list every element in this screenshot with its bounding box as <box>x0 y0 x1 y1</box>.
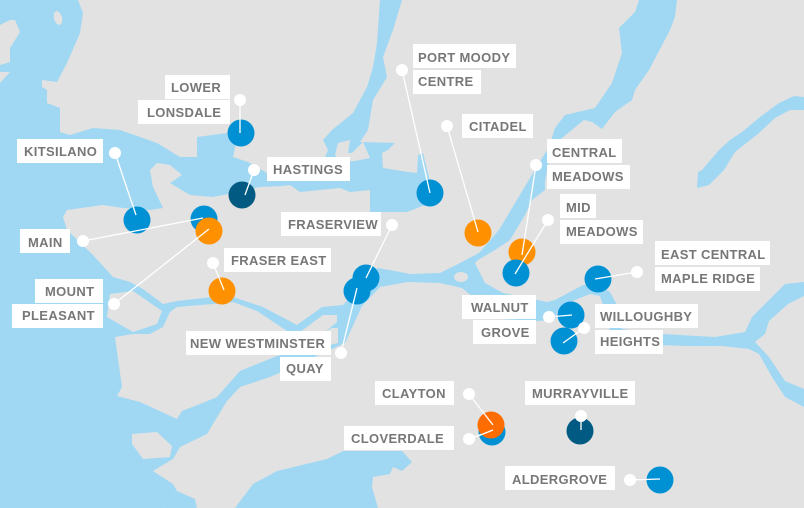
town centre: Murrayville: MURRAYVILLE <box>532 386 629 401</box>
town centre: Lower Lonsdale <box>138 75 254 146</box>
town centre: Main: MAIN <box>28 235 63 250</box>
land: river island <box>454 272 468 282</box>
water: Boundary Bay <box>163 451 412 508</box>
town centre: Central Meadows: CENTRAL <box>552 145 617 160</box>
town centre: Port Moody Centre <box>396 44 516 206</box>
land: Sea Island <box>107 291 162 332</box>
town centre: Lower Lonsdale: LONSDALE <box>147 105 221 120</box>
town centre: Kitsilano: KITSILANO <box>24 144 97 159</box>
water: strait, Burrard Inlet and Fraser north arm <box>0 0 432 508</box>
town centre: Mount Pleasant: MOUNT <box>45 284 94 299</box>
town centre: Citadel <box>441 114 533 246</box>
town centre: Walnut Grove <box>462 295 584 344</box>
town centre: Port Moody Centre: PORT MOODY <box>418 50 510 65</box>
town centre: Aldergrove <box>505 466 674 494</box>
town centre: Hastings: HASTINGS <box>273 162 343 177</box>
land: Richmond <box>115 302 338 419</box>
town centre: Cloverdale <box>344 418 506 450</box>
town centre: Fraserview: FRASERVIEW <box>288 217 378 232</box>
town centre: Mid Meadows: MID <box>566 200 591 215</box>
town centre: Main <box>20 206 218 253</box>
land: top-left islands <box>0 20 20 83</box>
town centre: New Westminster Quay <box>186 278 370 381</box>
town centre: Willoughby Heights: WILLOUGHBY <box>600 309 692 324</box>
town centre: Clayton <box>375 381 504 438</box>
town centre: Lower Lonsdale: LOWER <box>171 80 221 95</box>
town centre: Walnut Grove: WALNUT <box>471 300 529 315</box>
town centre: Kitsilano <box>17 139 150 234</box>
town centre: East Central Maple Ridge <box>584 241 770 292</box>
town centre: Mount Pleasant <box>12 218 222 328</box>
town centre: Aldergrove: ALDERGROVE <box>512 472 607 487</box>
town centre: Central Meadows <box>508 139 630 266</box>
town centre: East Central Maple Ridge: MAPLE RIDGE <box>661 271 755 286</box>
town centre: New Westminster Quay: QUAY <box>286 361 324 376</box>
land: peninsula at head of Indian Arm <box>335 140 370 162</box>
town centre: Willoughby Heights: HEIGHTS <box>600 334 660 349</box>
town centre: Fraser East: FRASER EAST <box>231 253 327 268</box>
town centre: Clayton: CLAYTON <box>382 386 446 401</box>
town centre: Fraserview <box>281 212 398 292</box>
town centre: Port Moody Centre: CENTRE <box>418 74 474 89</box>
town centre: Fraser East <box>207 248 331 304</box>
town centre: East Central Maple Ridge: EAST CENTRAL <box>661 247 766 262</box>
water: Fraser and Pitt rivers <box>378 0 804 407</box>
town centre: Central Meadows: MEADOWS <box>552 169 624 184</box>
town centre: Mid Meadows: MEADOWS <box>566 224 638 239</box>
land: small island in strait <box>52 10 64 26</box>
town centre: Hastings <box>228 157 350 208</box>
town centre: Willoughby Heights <box>550 304 698 354</box>
town centre: Cloverdale: CLOVERDALE <box>351 431 444 446</box>
town centre: Citadel: CITADEL <box>469 119 527 134</box>
town centre: Mid Meadows <box>502 194 643 286</box>
town centre: Walnut Grove: GROVE <box>481 325 530 340</box>
land: Westham Island <box>132 432 172 459</box>
town centre: New Westminster Quay: NEW WESTMINSTER <box>190 336 326 351</box>
water: Stave Lake <box>697 96 804 188</box>
town centre: Murrayville <box>525 381 635 444</box>
town centre: Mount Pleasant: PLEASANT <box>22 308 95 323</box>
